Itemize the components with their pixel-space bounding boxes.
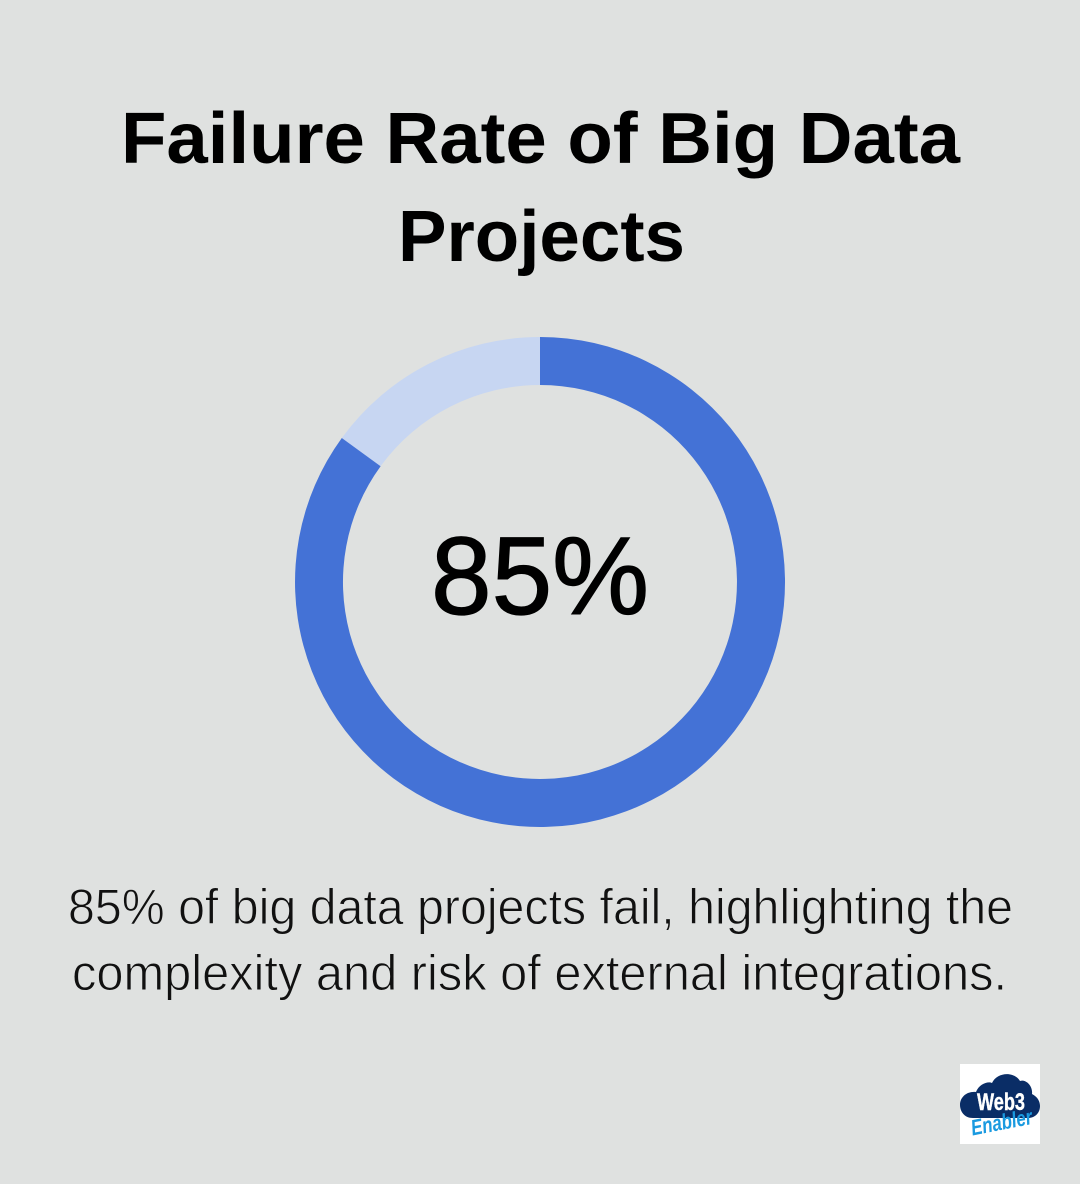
logo wordmark: Web3	[977, 1089, 1025, 1116]
description text: 85% of big data projects fail, highlighting the	[68, 879, 1013, 935]
title	[121, 99, 961, 277]
description text: complexity and risk of external integrations.	[72, 945, 1007, 1001]
title: Failure Rate of Big Data	[121, 99, 961, 179]
logo: Web3 Enabler	[960, 1064, 1040, 1144]
icon: cloud	[960, 1074, 1040, 1118]
donut segment: failed 85%	[295, 337, 785, 827]
donut segment: remaining 15%	[342, 337, 540, 466]
donut chart: 85%	[295, 337, 785, 827]
logo script text: Enabler	[969, 1104, 1035, 1140]
description text	[68, 879, 1013, 1001]
donut value: 85%	[431, 515, 649, 638]
title: Projects	[398, 197, 685, 277]
